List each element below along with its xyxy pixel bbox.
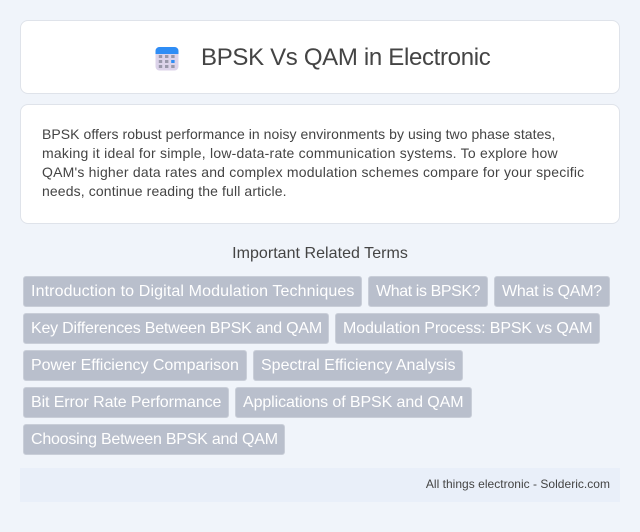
intro paragraph: QAM's higher data rates and complex modulation schemes compare for your specific [42, 164, 584, 180]
chip [23, 276, 362, 307]
header card [20, 20, 620, 94]
related terms chips [23, 276, 610, 455]
intro paragraph [42, 126, 584, 199]
chip: Applications of BPSK and QAM [243, 394, 463, 411]
chip: What is BPSK? [376, 283, 480, 300]
chip: Modulation Process: BPSK vs QAM [343, 320, 592, 337]
chip [253, 350, 463, 381]
footer credit: All things electronic - Solderic.com [426, 477, 610, 491]
title: BPSK Vs QAM in Electronic [201, 44, 490, 71]
chip [23, 424, 285, 455]
chip [23, 313, 329, 344]
chip: Key Differences Between BPSK and QAM [31, 320, 322, 337]
chip: Spectral Efficiency Analysis [261, 357, 455, 374]
intro paragraph: making it ideal for simple, low-data-rate communication systems. To explore how [42, 145, 558, 161]
intro paragraph: needs, continue reading the full article. [42, 183, 287, 199]
chip: Choosing Between BPSK and QAM [31, 431, 278, 448]
chip [235, 387, 472, 418]
footer bar [20, 468, 620, 502]
chip [23, 387, 229, 418]
chip: Power Efficiency Comparison [31, 357, 239, 374]
intro text panel [20, 104, 620, 224]
section heading: Important Related Terms [232, 245, 408, 262]
intro paragraph: BPSK offers robust performance in noisy environments by using two phase states, [42, 126, 555, 142]
chip [368, 276, 488, 307]
icon: calendar [156, 47, 178, 70]
chip [494, 276, 610, 307]
chip [335, 313, 600, 344]
chip [23, 350, 247, 381]
chip: Bit Error Rate Performance [31, 394, 221, 411]
chip: What is QAM? [502, 283, 602, 300]
chip: Introduction to Digital Modulation Techniques [31, 283, 355, 300]
